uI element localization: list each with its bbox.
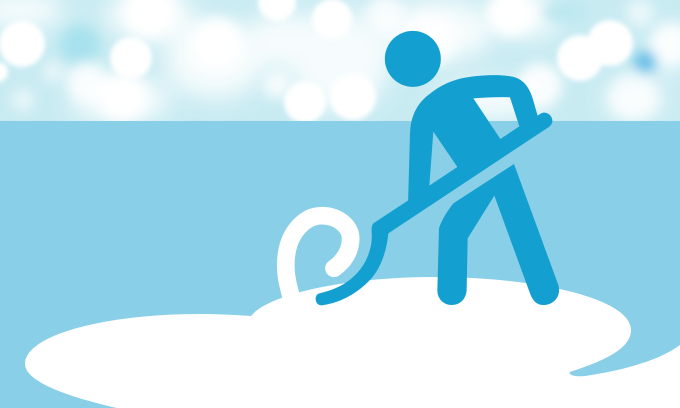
leg (437, 164, 559, 305)
figure shovelling snow (316, 31, 559, 305)
water band (0, 121, 680, 408)
white snow curl (286, 216, 351, 300)
head (385, 31, 441, 87)
snow mound (25, 277, 680, 408)
shovel handle and blade (316, 113, 552, 305)
bokeh sky background (0, 0, 680, 123)
torso and arms (408, 75, 539, 205)
